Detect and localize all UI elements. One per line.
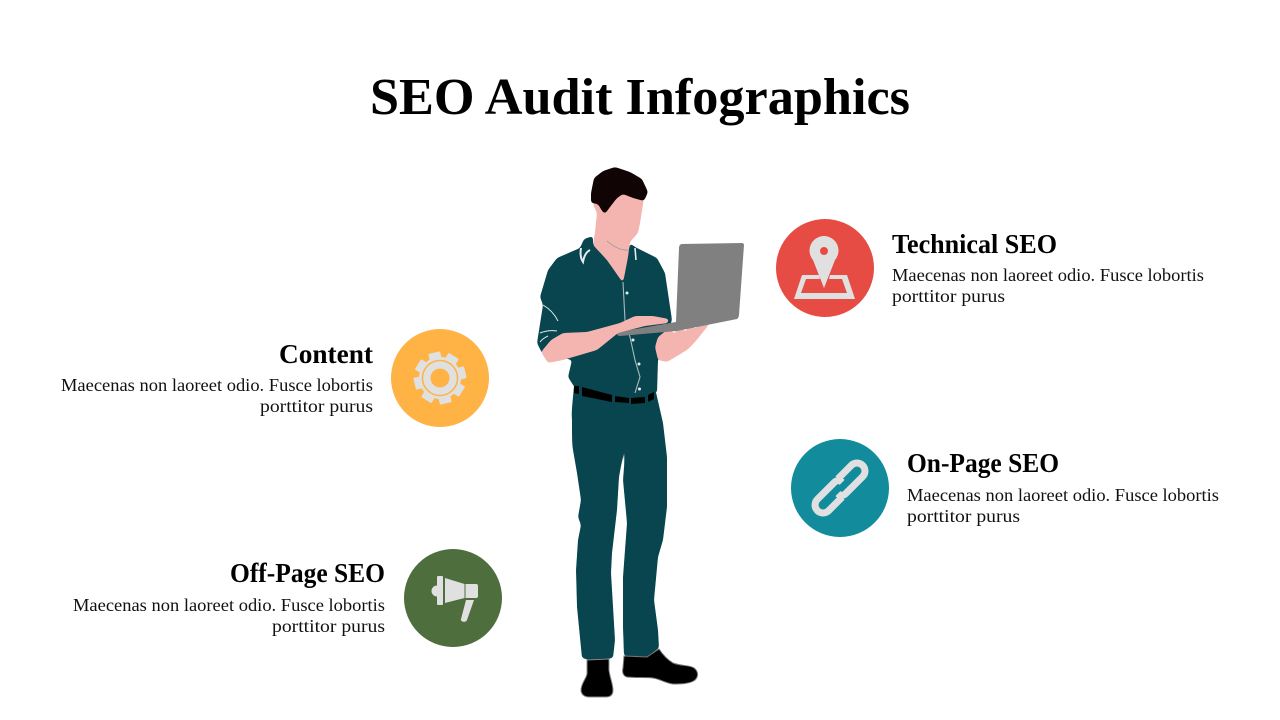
hair (591, 167, 648, 214)
near arm and hand (541, 316, 669, 363)
description (907, 485, 1219, 526)
description (61, 375, 373, 416)
description: porttitor purus (907, 506, 1020, 526)
callout: Off-Page SEO (73, 549, 502, 647)
shirt buttons (626, 292, 641, 390)
icon: map pin (776, 219, 874, 317)
shirt (537, 236, 672, 393)
callout: On-Page SEO (791, 439, 1219, 537)
heading: Content (279, 339, 373, 369)
description (73, 595, 385, 636)
trousers (572, 385, 667, 661)
icon: chain link (791, 439, 889, 537)
description: porttitor purus (892, 286, 1005, 306)
callout: Content (61, 329, 489, 427)
description: Maecenas non laoreet odio. Fusce lobortis (907, 485, 1219, 505)
description: Maecenas non laoreet odio. Fusce lobortis (61, 375, 373, 395)
collar and shirt details (540, 248, 640, 393)
finger highlights (672, 326, 696, 332)
description: porttitor purus (272, 616, 385, 636)
heading: On-Page SEO (907, 448, 1059, 478)
icon: gear (391, 329, 489, 427)
heading: Off-Page SEO (230, 558, 385, 588)
head and neck (592, 190, 644, 283)
neck shadow line (607, 241, 629, 250)
icon: megaphone (404, 549, 502, 647)
far hand (655, 322, 711, 362)
description: porttitor purus (260, 396, 373, 416)
title: SEO Audit Infographics (370, 69, 910, 126)
belt (574, 386, 654, 404)
left shoe (581, 659, 613, 697)
description: Maecenas non laoreet odio. Fusce lobortis (892, 265, 1204, 285)
description: Maecenas non laoreet odio. Fusce lobortis (73, 595, 385, 615)
right shoe (623, 649, 698, 684)
illustration: man holding laptop (537, 167, 744, 697)
heading: Technical SEO (892, 229, 1057, 259)
laptop (617, 243, 744, 336)
description (892, 265, 1204, 306)
callout: Technical SEO (776, 219, 1204, 317)
